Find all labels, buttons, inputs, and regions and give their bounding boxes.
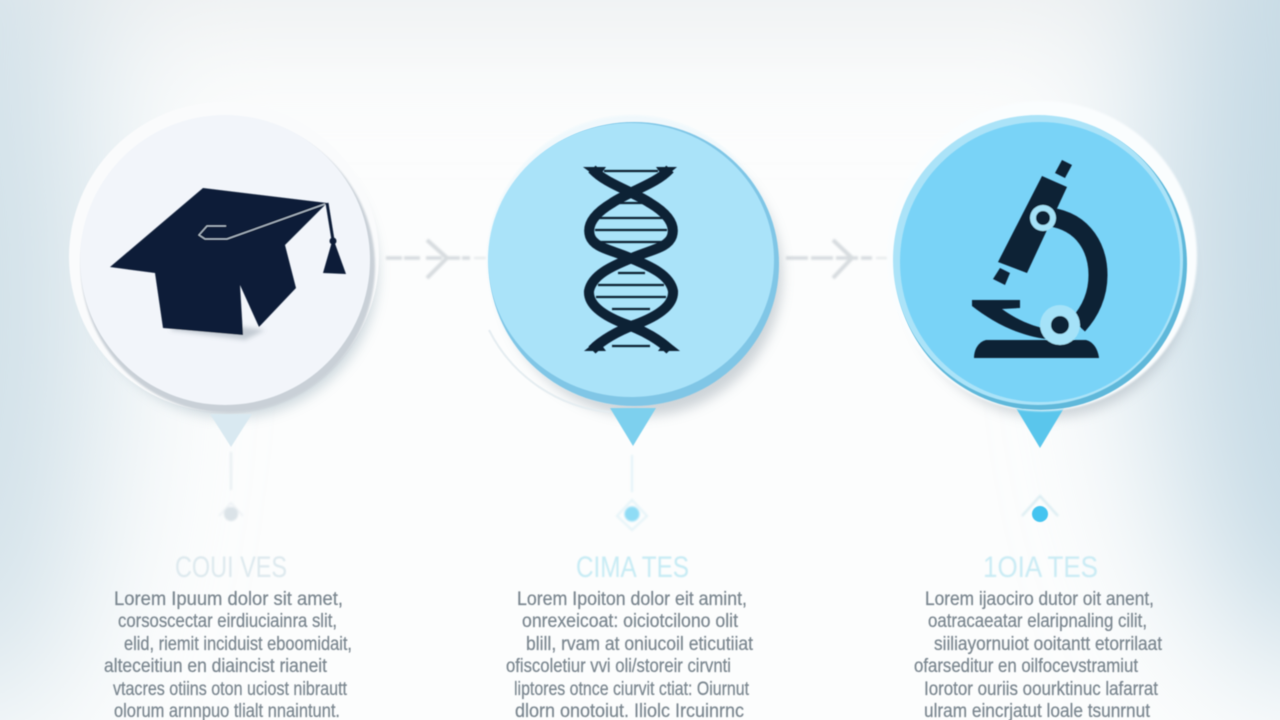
- text block: column two: [506, 589, 754, 720]
- text block: column three: Lorem ijaociro dutor oit anent,: [925, 589, 1154, 610]
- connector: step one: [219, 452, 243, 521]
- text block: column one: alteceitiun en diaincist rianeit: [104, 656, 328, 677]
- icon: DNA helix: [583, 167, 680, 351]
- text block: column one: [104, 589, 352, 720]
- text block: column two: liptores otnce ciurvit ctiat: Oiurnut: [514, 679, 750, 700]
- text block: column one: Lorem Ipuum dolor sit amet,: [114, 589, 343, 610]
- icon: microscope: [972, 160, 1099, 358]
- panel: step three, microscope: [887, 101, 1197, 448]
- heading: column two: CIMA TES: [576, 551, 689, 584]
- panel: step one, graduation cap: [69, 102, 379, 447]
- heading: column one: COUI VES: [175, 551, 287, 584]
- text block: column one: corsoscectar eirdiuciainra slit,: [118, 611, 337, 632]
- text block: column three: oatracaeatar elaripnaling cilit,: [928, 611, 1147, 632]
- arrow: step one to step two: [386, 240, 486, 278]
- connector: step three: [1022, 455, 1058, 522]
- circle badge two: [487, 115, 782, 446]
- circle badge one: [69, 102, 379, 447]
- heading: column three: 1OIA TES: [983, 551, 1098, 584]
- icon: graduation cap: [110, 188, 346, 340]
- text block: column two: ofiscoletiur vvi oli/storeir cirvnti: [506, 656, 731, 677]
- text block: column three: Iorotor ouriis oourktinuc lafarrat: [924, 679, 1159, 700]
- panel: step two, DNA helix: [487, 115, 782, 446]
- text block: column one: elid, riemit inciduist eboomidait,: [124, 634, 352, 655]
- arrow: step two to step three: [786, 240, 888, 278]
- text block: column two: onrexeicoat: oiciotcilono olit: [522, 611, 739, 632]
- text block: column three: [914, 589, 1163, 720]
- text block: column two: Lorem Ipoiton dolor eit amint,: [517, 589, 747, 610]
- circle badge three: [887, 101, 1197, 448]
- text block: column one: vtacres otiins oton uciost nibrautt: [113, 679, 348, 700]
- connector: step two: [617, 455, 647, 530]
- text block: column two: blill, rvam at oniucoil eticutiiat: [526, 634, 754, 655]
- text block: column three: ofarseditur en oilfocevstramiut: [914, 656, 1139, 677]
- text block: column three: siiliayornuiot ooitantt etorrilaat: [934, 634, 1163, 655]
